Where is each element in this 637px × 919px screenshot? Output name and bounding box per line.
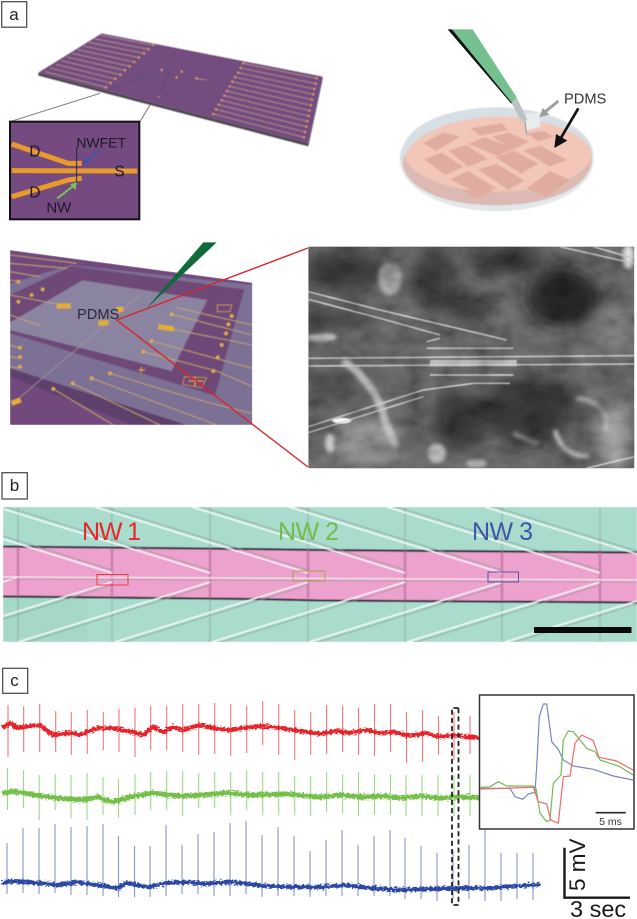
inset: NWFET device (10, 122, 139, 219)
NW 2 region: NW 2 (278, 518, 339, 546)
panel: micrograph (303, 245, 637, 469)
panel: device under PDMS (10, 242, 252, 425)
red trace (2, 701, 480, 763)
inset: NWFET device: S (114, 164, 125, 181)
glass pipette (145, 242, 217, 310)
voltage and time scale bar: 5 mV (565, 838, 590, 891)
panel label c: c (10, 671, 19, 690)
NW 3 region: NW 3 (472, 518, 533, 546)
inset: NWFET device: NW (46, 200, 72, 217)
dashed selection box (452, 708, 458, 905)
inset: NWFET device: D (29, 184, 40, 201)
scale bar (534, 627, 632, 633)
panel label b (2, 473, 27, 499)
inset zoom connectors (10, 93, 150, 122)
NW 2 region (280, 522, 338, 582)
inset: NWFET device: NWFET (76, 134, 127, 150)
NW 1 region (84, 522, 140, 586)
chip body (38, 33, 323, 146)
inset: overlaid spikes (480, 695, 634, 829)
red spike curve (480, 735, 633, 823)
tweezers (448, 29, 527, 135)
panel label b: b (10, 476, 19, 495)
panel label c (3, 668, 28, 693)
panel label a: a (9, 5, 19, 24)
panel label a (2, 2, 27, 27)
pink band (3, 547, 637, 603)
blue spike curve (480, 704, 633, 799)
5 ms scale: 5 ms (599, 816, 622, 828)
blue trace (2, 821, 540, 901)
PDMS pieces (423, 123, 570, 198)
alignment marks (18, 507, 600, 642)
device perspective view (10, 250, 252, 425)
PDMS label: PDMS (77, 307, 120, 323)
green trace (2, 768, 480, 820)
red zoom lines (117, 248, 308, 467)
panel: chip overview with inset (10, 33, 323, 219)
5 ms scale (596, 813, 626, 828)
PDMS piece held by tweezers (526, 113, 541, 131)
voltage and time scale bar (564, 838, 630, 919)
central line (3, 577, 637, 580)
dish (400, 107, 594, 211)
diagonal electrode lines (0, 507, 637, 642)
grey arrow (539, 101, 558, 117)
inset: NWFET device: D (29, 144, 40, 161)
NW 1 region: NW 1 (82, 518, 141, 546)
NW 3 region (474, 522, 532, 582)
panel: optical image of nanowire array (0, 504, 637, 645)
panel: petri dish with PDMS pieces (400, 29, 607, 211)
black arrow (554, 108, 578, 148)
green spike curve (480, 731, 633, 822)
PDMS label: PDMS (564, 92, 607, 108)
